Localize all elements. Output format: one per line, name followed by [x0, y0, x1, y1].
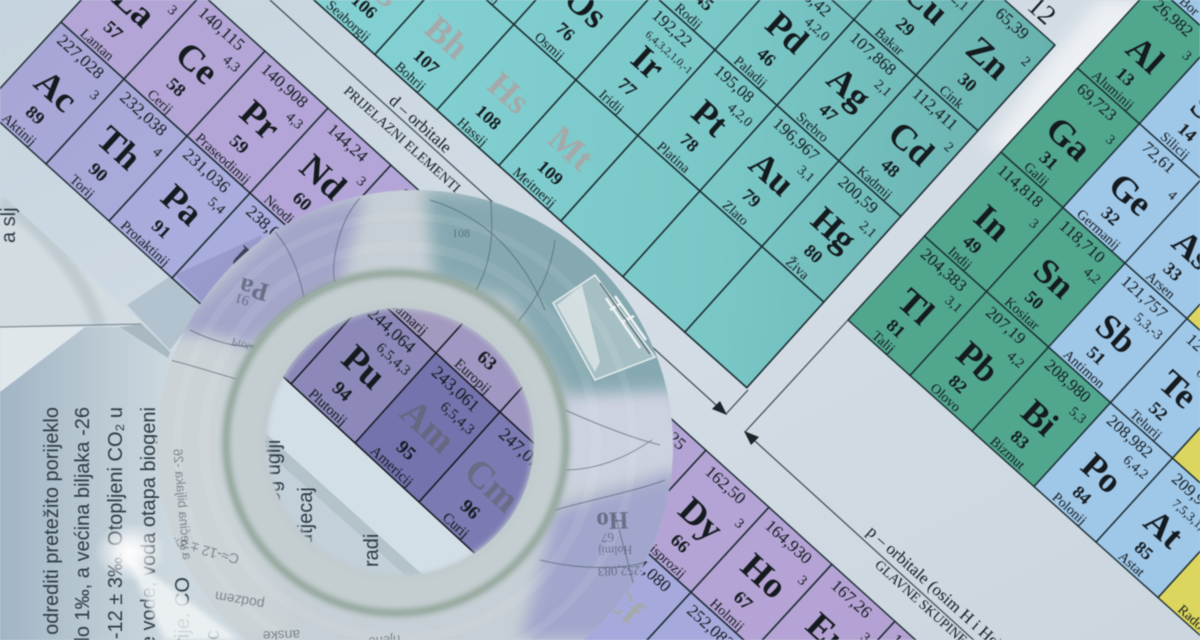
refracted grid lines: [170, 195, 665, 610]
cell: Cd: 2: [941, 139, 957, 156]
cell: Pb: Pb: [949, 333, 1007, 391]
cell: Sn: 50: [1021, 287, 1048, 313]
cell: Pm: [313, 165, 454, 307]
cell: Pd: Pd: [758, 4, 816, 61]
cell: Pu: 6,5,4,3: [373, 340, 413, 379]
cell: Hg: 200,59: [834, 172, 882, 218]
cell: In: In: [966, 197, 1019, 249]
cell: Th: 232,038: [116, 88, 171, 140]
cell: Bi: Bizmut: [987, 434, 1027, 473]
cell: Sb: Antimon: [1060, 348, 1107, 392]
cell: Pb: 4,2: [1004, 349, 1027, 372]
cell: Hs: Hs: [480, 64, 538, 122]
cell: Ga: 31: [1035, 147, 1062, 174]
cell: Dy: Disprozij: [639, 535, 689, 582]
cell: In: 114,818: [994, 161, 1047, 211]
cell: Cm: 96: [456, 496, 484, 524]
cell: Os: 76: [552, 18, 579, 45]
cell: Ir: Iridij: [595, 87, 627, 117]
cell: Zn: [915, 0, 1055, 131]
book page background: [0, 185, 520, 640]
refracted element text: Ho: [596, 506, 629, 534]
cell: At: At: [1136, 501, 1192, 556]
cell: Au: 79: [738, 185, 765, 212]
cell: Pt: Platina: [653, 139, 694, 177]
cell: Cm: Curij: [439, 510, 472, 542]
cell: Au: 3,1: [794, 162, 818, 186]
cell: Tl: 204,383: [917, 244, 971, 295]
refracted element text: 108: [452, 226, 470, 240]
cell: Po: 208,982: [1103, 411, 1157, 462]
cell: Pd: 46: [753, 43, 780, 70]
refracted book text: a većina biljaka -26: [170, 448, 195, 560]
cell: Tl: Tl: [890, 280, 942, 333]
p-block panel: [847, 0, 1200, 640]
cell: Am: 6,5,4,3: [437, 399, 477, 438]
cell: Cf: Cf: [595, 576, 652, 632]
cell: Po: [1033, 403, 1172, 543]
cell: Zn: Zn: [958, 28, 1018, 87]
cell: Cu: [853, 0, 993, 76]
cell: Rh: Rodij: [671, 0, 705, 33]
cell: In: 49: [959, 231, 986, 258]
cell: As: [1124, 179, 1200, 319]
cell: Pt: [637, 50, 777, 192]
cell: Al: Aluminij: [1089, 68, 1136, 113]
cell: Bi: 83: [1007, 426, 1033, 453]
cell: Tl: Talij: [868, 329, 897, 357]
cell: Sb: 121,757: [1117, 272, 1171, 322]
cell: Au: Zlato: [719, 197, 752, 229]
cell: Bi: 5,3: [1066, 404, 1089, 427]
book seen through hole: utjecaj: [295, 487, 317, 545]
cell: Th: 90: [85, 159, 112, 186]
cell: Ag: [776, 20, 916, 162]
cell: La: 57: [100, 17, 127, 44]
cell: Ir: Ir: [624, 38, 673, 87]
cell: Tb: 158,925: [635, 402, 690, 454]
cell: Te: Telurij: [1127, 407, 1164, 443]
cell: Pr: 59: [226, 131, 253, 158]
cell: Ga: Galij: [1020, 160, 1051, 190]
cell: Pu: [308, 310, 416, 428]
cell: Nd: 144,24: [323, 120, 372, 166]
cell: Bh: 107: [410, 45, 443, 78]
cell: Ho: [690, 507, 832, 640]
cell: Dy: 3: [731, 515, 747, 532]
cell: Tl: 3,1: [942, 293, 965, 316]
d-orbital bracket and labels: PRIJELAZNI ELEMENTI: [340, 84, 463, 196]
cell: Dy: 66: [667, 530, 694, 557]
cell: Ho: 164,930: [761, 516, 816, 568]
cell: Ho: Ho: [733, 545, 796, 606]
cell: Er: 167,26: [827, 576, 876, 622]
book seen through hole: radi: [361, 534, 383, 567]
cell: Cu: Bakar: [871, 25, 907, 59]
cell: Pt: 78: [676, 129, 703, 156]
cell: Si: Silicij: [1157, 130, 1192, 163]
cell: Tl: 81: [883, 315, 909, 342]
cell: Ce: 4,3: [219, 52, 243, 76]
sun flare: [94, 522, 240, 640]
cell: Nd: 60: [289, 188, 316, 215]
cell: Er: [753, 564, 895, 640]
reflected label block: [553, 275, 655, 380]
cell: Hg: Živa: [782, 253, 813, 284]
cell: Bi: [971, 347, 1110, 487]
glass refraction: pale right: [565, 390, 680, 490]
cell: Ce: 140,115: [194, 3, 249, 54]
cell: Te: [1110, 319, 1200, 459]
glass: hole rim: [264, 306, 536, 578]
cell: Pu: Plutonij: [305, 386, 350, 430]
cell: Ac: 89: [22, 102, 49, 129]
glass refraction: teal top-right: [425, 190, 680, 410]
cell: Pr: [186, 51, 328, 194]
refracted element text: 108: [494, 184, 517, 203]
cell: Cd: 48: [877, 155, 904, 181]
glass refraction: purple lower-right: [520, 470, 680, 640]
cell: In: Indij: [945, 244, 974, 273]
cell: Ir: 6,4,3,2,1,0,-1: [643, 29, 695, 77]
cell: Pa: Pa: [154, 176, 211, 233]
cell: Ce: Cerij: [144, 87, 176, 117]
cell: At: 85: [1131, 537, 1157, 564]
glass: view through hole: [266, 308, 534, 575]
hole table cells: [282, 308, 534, 554]
cell: Pb: [909, 292, 1048, 432]
cell: Cm: [443, 428, 534, 540]
cell: Al: Al: [1119, 28, 1172, 81]
cell: Sb: 51: [1083, 342, 1110, 369]
cell: Dy: [627, 450, 769, 593]
cell: Ho: 67: [730, 587, 757, 614]
cell: Mt: [498, 80, 638, 222]
cell: Ga: 69,723: [1073, 79, 1121, 125]
cell: Ag: 47: [815, 99, 842, 126]
cell: Am: 95: [392, 437, 420, 465]
book seen through hole: [266, 435, 420, 576]
cell: Rh: [652, 0, 792, 51]
cell: Pa: Protaktinij: [117, 218, 173, 270]
cell: Cd: Cd: [881, 113, 942, 174]
cell: Th: Torij: [66, 172, 97, 202]
cell: Zn: 2: [1018, 54, 1034, 70]
cell: Pa: 91: [148, 216, 175, 243]
cell: Cd: 112,411: [909, 84, 962, 134]
cell: Po: Po: [1074, 445, 1130, 501]
cell: Dy: Dy: [671, 489, 732, 549]
cell: Au: Au: [742, 143, 803, 204]
cell: Hg: Hg: [804, 199, 865, 259]
cell: Bh: Bh: [417, 8, 477, 67]
cell: Hg: 2,1: [856, 218, 880, 241]
cell: Ir: 192,22: [648, 6, 696, 51]
cell: Sb: 5,3,-3: [1131, 310, 1165, 343]
book seen through hole: og uglji: [263, 440, 285, 503]
cell: Pd: 4,2,0: [801, 14, 833, 45]
cell: Hg: 80: [800, 240, 827, 267]
cell: Bh: Bohrij: [391, 59, 429, 95]
cell: Cm: Cm: [456, 450, 527, 521]
cell: Dy: 162,50: [701, 462, 750, 508]
cell: Bh: [374, 0, 514, 111]
cell: Th: 4: [149, 144, 165, 161]
cell: Sn: [986, 208, 1125, 348]
cell: Pt: 195,08: [710, 61, 758, 107]
cell: La: 3: [164, 2, 180, 19]
cell: Pd: Paladij: [730, 53, 770, 91]
empty cell: group 11 period 7: [623, 191, 762, 332]
cell: Po: 84: [1069, 482, 1095, 508]
cell: Ga: Ga: [1038, 109, 1099, 169]
cell: Zn: Cink: [936, 82, 968, 113]
cell: Th: Th: [89, 117, 150, 178]
cell: Th: [45, 79, 187, 222]
refracted element text: Pa: [236, 272, 272, 307]
cell: At: Astat: [1115, 549, 1147, 580]
cell: Ge: 72,61: [1138, 138, 1179, 177]
cell: Ce: [123, 0, 265, 137]
cell: Au: 196,967: [769, 114, 823, 165]
book text: [0, 207, 224, 640]
cell: Hg: [761, 161, 901, 303]
cell: In: [924, 152, 1063, 292]
cell: Am: Americij: [367, 443, 416, 490]
cell: Ho: 3: [794, 572, 810, 589]
cell: Sb: Sb: [1088, 306, 1145, 362]
cell: Cd: [838, 75, 978, 217]
cell: Ac: Ac: [27, 61, 86, 120]
cell: Zn: 65,39: [992, 4, 1033, 43]
refracted element text: 252,083: [598, 563, 640, 579]
cell: Pm: 145: [394, 184, 427, 215]
glass: outer body: [150, 180, 680, 640]
cell: Sn: Kositar: [1001, 295, 1042, 334]
cell: Bi: Bi: [1014, 392, 1066, 444]
cell: Am: 243,061: [428, 362, 484, 416]
cell: Mt: 109: [534, 156, 567, 189]
cell: Ga: [1000, 68, 1139, 208]
concentric glass highlights: [438, 216, 628, 384]
empty cell: group 12 period 7: [685, 246, 824, 388]
cell: Am: Am: [392, 391, 463, 462]
cell: Au: [699, 105, 839, 247]
cell: Tm: [817, 621, 958, 640]
refracted element text: Protaktinij: [230, 335, 278, 362]
cell: U: U: [222, 238, 269, 285]
cell: Pa: [108, 136, 250, 279]
p-orbital bracket and labels: [744, 320, 1007, 640]
cell: Re: [451, 0, 591, 25]
cell: Cu: 29: [892, 13, 919, 40]
refracted element text: Holmij: [598, 543, 632, 558]
refracted element text: 67: [600, 530, 614, 545]
cell: Cf: 251,080: [620, 544, 675, 596]
cell: Cf: [550, 535, 691, 640]
cell: Ge: [1062, 124, 1200, 264]
cell: La: [60, 0, 202, 80]
cell: Ac: 227,028: [53, 31, 108, 83]
cell: Se: [1187, 235, 1200, 374]
cell: Tb: [565, 393, 706, 535]
cell: Pt: Pt: [684, 92, 736, 144]
cell: Zn: 30: [954, 69, 981, 96]
book text: odrediti pretežito porijeklo: [41, 407, 63, 635]
glass refraction: purple top-left: [170, 195, 365, 345]
cell: Mt: Meitnerij: [509, 164, 559, 211]
cell: Ag: 107,868: [846, 28, 900, 79]
cell: Ge: 4: [1164, 188, 1180, 204]
cell: U: 238,029: [242, 202, 297, 254]
cell: Ac: [0, 22, 124, 165]
cell: Pa: 231,036: [179, 145, 234, 197]
cell: As: Arsen: [1142, 269, 1177, 303]
cell: La: Lantan: [77, 26, 117, 64]
cell: Si: 14: [1174, 119, 1200, 145]
empty cell: group 10 period 7: [561, 135, 700, 277]
cell: Eu: Europij: [451, 356, 494, 398]
cell: Pr: 140,908: [257, 60, 312, 112]
cell: Sb: [1048, 263, 1187, 403]
cell: Al: 3: [1179, 49, 1194, 64]
cell: Cd: Kadmij: [853, 163, 895, 203]
cell: Ce: Ce: [168, 33, 227, 92]
cell: Pb: 82: [945, 371, 971, 397]
cell: Pa: 5,4: [204, 194, 228, 218]
cell: Pr: Praseodimij: [192, 130, 254, 188]
cell: Po: Polonij: [1049, 490, 1089, 528]
cell: Cm: 247,07: [495, 424, 545, 472]
cell: Am: [369, 366, 479, 488]
cell: Os: Osmij: [531, 29, 567, 64]
d-orbital bracket and labels: [270, 0, 748, 415]
cell: Ce: 58: [163, 74, 190, 101]
cell: Nd: [249, 108, 391, 251]
cell: Pt: 4,2,0: [724, 100, 756, 130]
cell: Al: [1077, 0, 1200, 124]
cell: Hs: Hassij: [454, 115, 491, 150]
cell: Ga: 3: [1102, 133, 1118, 148]
cell: Sm: Samarij: [386, 296, 431, 339]
cell: Os: [513, 0, 653, 81]
d-orbital bracket and labels: d – orbitale: [385, 91, 456, 157]
cell: Ge: 32: [1097, 203, 1124, 229]
cell: Sn: 118,710: [1056, 216, 1109, 267]
cell: Ag: Srebro: [793, 109, 831, 146]
cell: In: 3: [1026, 216, 1041, 232]
cell: U: [172, 193, 313, 335]
cell: Pb: Olovo: [927, 381, 963, 415]
cell: Pr: Pr: [232, 92, 289, 148]
refracted book text: podzem: [214, 588, 266, 613]
cell: Sn: Sn: [1026, 250, 1083, 306]
cell: Hs: 108: [472, 101, 505, 134]
cell: Nd: Nd: [292, 146, 355, 207]
cell: Al: 13: [1112, 63, 1139, 90]
cell: Pb: 207,19: [982, 303, 1030, 348]
refracted element text: 91: [234, 290, 251, 308]
cell: Ge: Germanij: [1073, 207, 1123, 253]
cell: Ag: Ag: [819, 58, 879, 118]
cell: Ge: Ge: [1101, 165, 1161, 224]
cell: Pu: 244,064: [364, 303, 420, 357]
cell: Mt: Mt: [540, 118, 602, 179]
cell: Ho: Holmij: [706, 596, 747, 635]
cell: I: [1172, 374, 1200, 514]
cell: Ir: [575, 0, 715, 136]
cell: Es: [613, 592, 754, 640]
cell: Ac: 3: [86, 87, 102, 104]
cell: Nd: Neodimij: [260, 192, 311, 240]
cell: Hs: [436, 24, 576, 166]
cell: Sn: 4,2: [1080, 265, 1103, 288]
cell: Pu: Pu: [333, 337, 394, 398]
refracted element text: [230, 184, 640, 579]
cell: Si: [1139, 40, 1200, 180]
d-block teal panel: [312, 0, 1055, 388]
cell: Ir: 77: [614, 74, 641, 101]
glass: thick inner ring: [226, 273, 566, 613]
cell: At: [1095, 458, 1200, 598]
cell: B: [1153, 0, 1200, 40]
cell: Rn: [1157, 514, 1200, 640]
cell: Eu: 63: [473, 347, 501, 375]
cell: Nd: 3: [353, 173, 369, 190]
cell: Pd: [714, 0, 854, 106]
refracted book text: [164, 448, 401, 640]
cell: Ag: 2,1: [871, 77, 895, 100]
cell: As: 33: [1159, 258, 1186, 285]
refracted book text: C≈-12 ± 3‰: [164, 533, 241, 568]
cell: Sg: [312, 0, 452, 55]
glass refraction: pale left: [157, 338, 218, 442]
cell: Pu: 94: [328, 378, 356, 406]
cell: Te: 52: [1145, 398, 1172, 424]
cell: Pr: 4,3: [282, 109, 306, 133]
cell: Tl: [847, 236, 986, 376]
cell: Po: 6,4,2: [1120, 453, 1151, 483]
cell: Bi: 208,980: [1041, 356, 1095, 406]
